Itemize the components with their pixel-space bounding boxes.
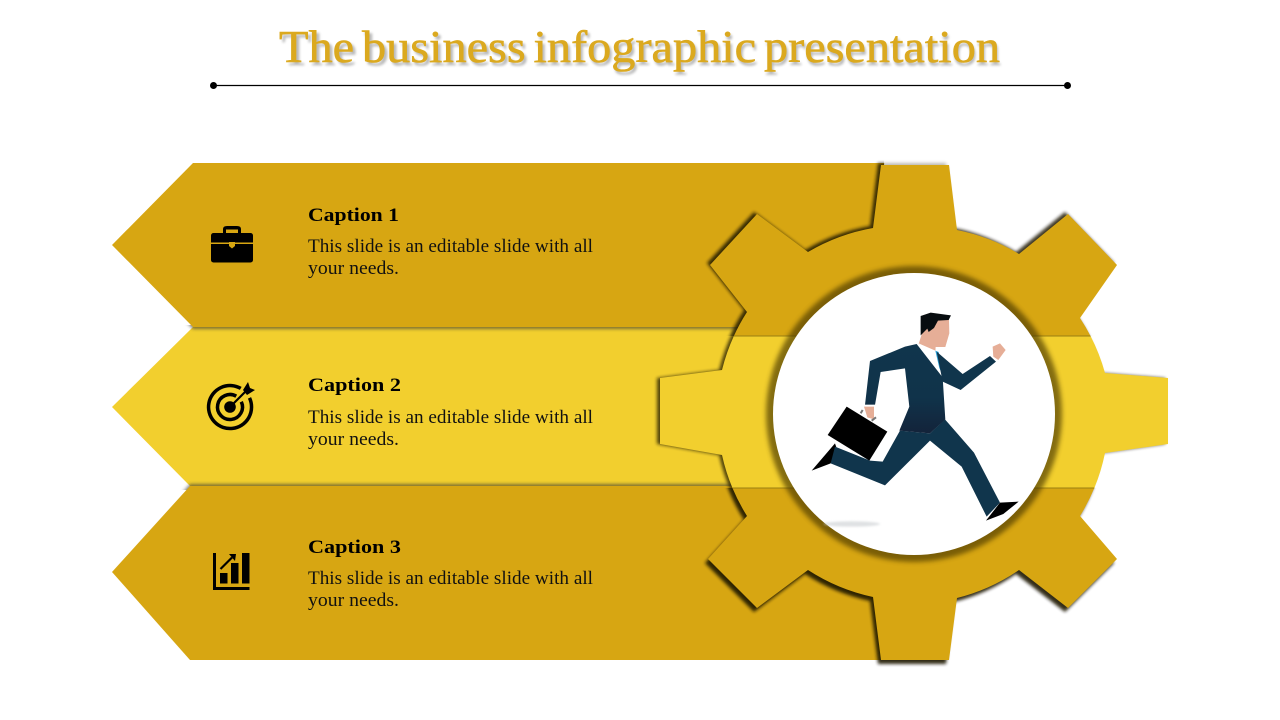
caption row 1 xyxy=(211,205,593,279)
fist xyxy=(993,343,1006,360)
caption 1 body: your needs. xyxy=(308,259,399,279)
caption 2 heading: Caption 2 xyxy=(308,375,401,396)
gear lower shadow xyxy=(703,488,1116,667)
icon: briefcase xyxy=(211,226,253,262)
arrow band 3 shadow xyxy=(182,482,732,490)
neck and face xyxy=(919,319,949,352)
hand holding case xyxy=(864,407,874,419)
title divider with end dots xyxy=(210,82,1071,89)
gear slice seams xyxy=(732,336,1094,488)
title: The business infographic presentation xyxy=(279,21,1000,72)
caption 2 body: This slide is an editable slide with all xyxy=(308,408,593,428)
caption 3 body: your needs. xyxy=(308,591,399,611)
caption row 3 xyxy=(213,537,593,611)
infographic canvas xyxy=(112,30,1168,667)
arrow band 1 shadow xyxy=(186,325,738,332)
tie xyxy=(935,351,944,377)
gear upper slice xyxy=(710,165,1117,336)
caption row 2 xyxy=(209,375,593,450)
title: The business infographic presentation xyxy=(282,24,1001,75)
gear lower slice xyxy=(708,488,1117,660)
caption 2 body: your needs. xyxy=(308,430,399,450)
gear centre white circle xyxy=(773,273,1055,555)
ground shadow xyxy=(823,521,880,527)
rear shoe xyxy=(812,443,837,471)
icon: target with dart xyxy=(209,382,255,429)
arrow band 3 (bottom, dark gold) xyxy=(112,486,885,660)
gear hole shadow ring xyxy=(766,266,1062,562)
running businessman illustration xyxy=(812,313,1019,527)
gear xyxy=(657,158,1170,664)
legs xyxy=(831,419,1000,517)
jacket and rear arm xyxy=(865,344,945,433)
briefcase xyxy=(828,407,887,461)
briefcase handle xyxy=(861,410,876,421)
gear upper shadow xyxy=(705,160,1116,336)
caption 3 body: This slide is an editable slide with all xyxy=(308,569,593,589)
caption 3 heading: Caption 3 xyxy=(308,537,401,558)
top tooth soft highlight xyxy=(884,158,956,165)
gear middle shadow xyxy=(654,336,1167,488)
shirt xyxy=(919,343,943,378)
front shoe xyxy=(986,502,1019,521)
shirt cuff xyxy=(865,405,875,406)
front arm xyxy=(937,352,996,390)
icon: rising bar chart xyxy=(213,553,250,590)
hair xyxy=(921,313,951,335)
caption 1 heading: Caption 1 xyxy=(308,205,399,226)
gear middle slice xyxy=(660,336,1168,488)
caption 1 body: This slide is an editable slide with all xyxy=(308,237,593,257)
arrow band 1 (top, dark gold) xyxy=(112,163,885,327)
arrow band 2 (middle, yellow) xyxy=(112,327,780,486)
